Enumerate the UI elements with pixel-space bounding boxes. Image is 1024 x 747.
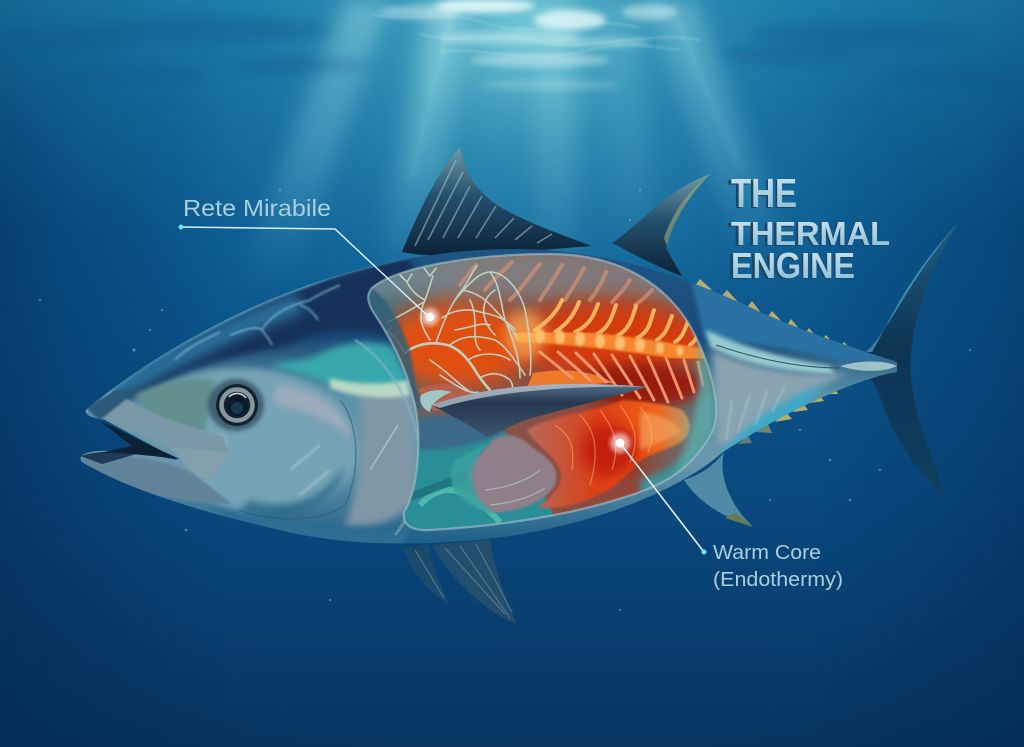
ribs below spine bbox=[540, 352, 703, 402]
finlets bbox=[694, 279, 853, 444]
gill cover outline bbox=[355, 340, 420, 535]
callout: Rete Mirabile bbox=[178, 195, 439, 326]
eye bbox=[208, 379, 264, 431]
rete mirabile vein network bbox=[385, 266, 531, 400]
title: THE bbox=[731, 170, 797, 216]
callout: Rete Mirabile: Rete Mirabile bbox=[183, 195, 331, 221]
second dorsal fin bbox=[612, 174, 710, 276]
fish body bbox=[81, 249, 897, 544]
mauve organ bbox=[468, 436, 556, 513]
title: ENGINE bbox=[731, 245, 855, 286]
shoulder organ bbox=[418, 384, 480, 411]
anal fin bbox=[684, 452, 753, 527]
floating particles bbox=[39, 189, 971, 611]
warm core stomach bbox=[527, 400, 690, 508]
first dorsal fin bbox=[402, 147, 592, 256]
pectoral fin bbox=[431, 384, 647, 437]
water surface caustics bbox=[0, 0, 1010, 90]
title: THERMAL bbox=[731, 215, 890, 252]
callout: Warm Core: Warm Core bbox=[713, 542, 821, 564]
spine bbox=[520, 335, 703, 356]
body shading and colour bands bbox=[80, 255, 897, 548]
tail fin bbox=[866, 223, 958, 498]
title bbox=[728, 170, 890, 287]
panel outline bbox=[368, 254, 716, 530]
lower teal area bbox=[404, 432, 554, 530]
muscle glow bbox=[380, 303, 530, 387]
cheek bbox=[160, 368, 357, 511]
callout: Warm Core: (Endothermy) bbox=[713, 569, 843, 591]
tuna fish bbox=[80, 147, 958, 624]
ventral fins bbox=[403, 540, 517, 624]
teal head band bbox=[270, 342, 410, 393]
mouth line bbox=[100, 421, 180, 459]
panel: cutaway thermal window bbox=[367, 252, 717, 532]
rear body bbox=[690, 282, 886, 362]
ribs above spine bbox=[535, 300, 700, 345]
callout: Warm Core bbox=[610, 433, 843, 591]
lower belly bbox=[209, 504, 406, 544]
title: THERMAL bbox=[728, 216, 889, 253]
upper faint ribs bbox=[460, 262, 652, 305]
jaws bbox=[102, 398, 228, 452]
lower muscle organ bbox=[528, 370, 612, 386]
light rays from the surface bbox=[235, 0, 785, 290]
title: ENGINE bbox=[728, 246, 854, 287]
title: THE bbox=[728, 171, 796, 217]
